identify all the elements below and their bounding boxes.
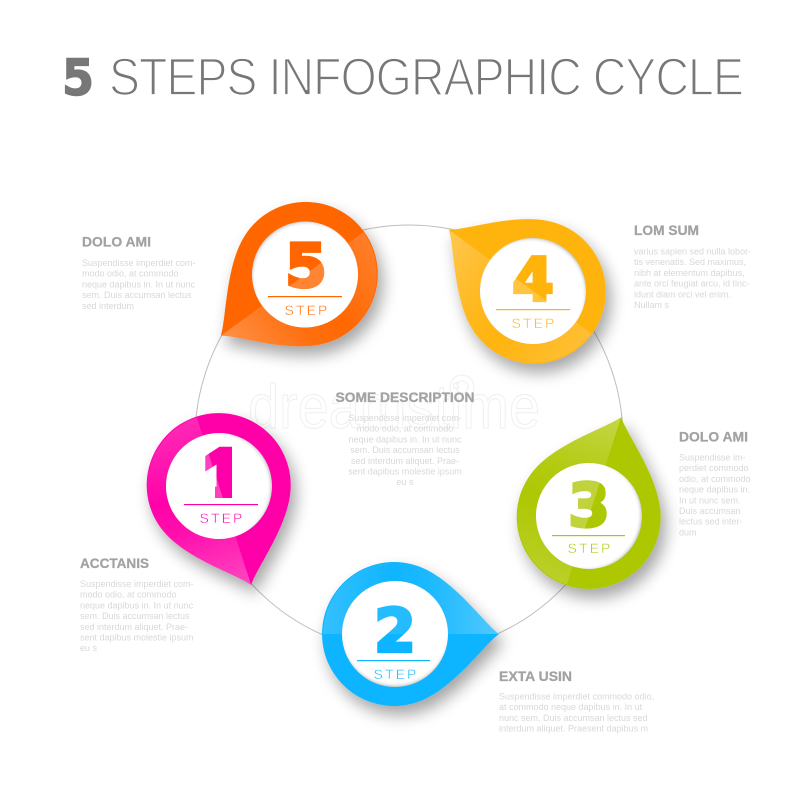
center text: sent dapibus molestie ipsum (348, 466, 462, 476)
center text: Suspendisse imperdiet com- (348, 413, 462, 423)
body: Suspendisse imperdiet com- (80, 579, 194, 589)
body (82, 258, 196, 311)
heading: ACCTANIS (80, 556, 149, 571)
green drop (498, 395, 690, 608)
body: Suspendisse imperdiet com- (82, 258, 196, 268)
number 4: 4 (512, 246, 554, 316)
body: ante orci feugiat arcu, id tinc- (634, 279, 750, 289)
drop highlight and inner disc (449, 230, 591, 362)
body (499, 692, 654, 734)
center description (336, 390, 474, 487)
body: Suspendisse imperdiet commodo odio, (499, 692, 654, 702)
step 2 marker (322, 562, 499, 706)
body: sent dapibus molestie ipsum (80, 632, 194, 642)
drop highlight and inner disc (323, 562, 499, 688)
body: varius sapien sed nulla lobor- (634, 246, 751, 256)
body: odio, at commodo (679, 474, 751, 484)
body: neque dapibus in. (679, 485, 750, 495)
text block: step 2 (499, 669, 654, 734)
divider (552, 535, 625, 536)
number 5: 5 (285, 232, 327, 302)
center text: sem. Duis accumsan lectus (350, 445, 460, 455)
divider (496, 309, 570, 310)
body: neque dapibus in. In ut nunc (80, 600, 194, 610)
number 3: 3 (568, 471, 610, 541)
body: sed interdum aliquet. Prae- (80, 622, 188, 632)
drop highlight and inner disc (148, 418, 272, 585)
drop highlight and inner disc (221, 222, 377, 346)
body: at commodo neque dapibus in. In ut (499, 702, 643, 712)
yellow drop (407, 172, 634, 392)
number 2: 2 (374, 596, 416, 666)
body: modo odio, at commodo (82, 269, 179, 279)
text block: step 1 (80, 556, 194, 653)
step label: STEP (512, 315, 556, 331)
center text (348, 413, 462, 487)
body: neque dapibus in. In ut nunc (82, 279, 196, 289)
divider (184, 504, 258, 505)
body: idunt diam orci vel enim. (634, 289, 731, 299)
step label: STEP (374, 666, 418, 682)
body: nibh at elementum dapibus, (634, 268, 745, 278)
text block: step 5 (82, 234, 196, 311)
center heading: SOME DESCRIPTION (336, 390, 474, 405)
heading: EXTA USIN (499, 669, 572, 684)
step label: STEP (285, 302, 329, 318)
body: Suspendisse im- (679, 452, 746, 462)
body: perdiet commodo (679, 463, 749, 473)
body: modo odio, at commodo (80, 590, 177, 600)
text block: step 4 (634, 223, 751, 310)
step 4 marker (446, 218, 620, 382)
center text: neque dapibus in. In ut nunc (348, 434, 462, 444)
step 5 marker (218, 201, 392, 366)
cycle ring line (195, 225, 623, 653)
body: sem. Duis accumsan lectus (82, 290, 192, 300)
drop highlight and inner disc (518, 418, 642, 584)
body: dum (679, 527, 697, 537)
body: tis venenatis. Sed maximus, (634, 257, 746, 267)
body: interdum aliquet. Praesent dapibus m (499, 724, 648, 734)
text block: step 3 (679, 430, 751, 537)
heading: DOLO AMI (679, 430, 748, 444)
blue drop (322, 562, 499, 706)
center text: eu s (396, 477, 414, 487)
body: sem. Duis accumsan lectus (80, 611, 190, 621)
title (62, 48, 743, 107)
number 1: 1 (204, 436, 242, 512)
center text: sed interdum aliquet. Prae- (351, 456, 459, 466)
orange drop (179, 173, 406, 394)
body: In ut nunc sem. (679, 495, 741, 505)
body: nunc sem. Duis accumsan lectus sed (499, 713, 648, 723)
watermark: dreamstime (248, 373, 540, 442)
step label: STEP (568, 540, 612, 556)
divider (357, 660, 430, 661)
heading: DOLO AMI (82, 234, 151, 250)
step 3 marker (512, 417, 676, 608)
magenta drop (128, 394, 320, 607)
body (80, 579, 194, 653)
step 1 marker (142, 412, 306, 600)
title number: 5 (62, 49, 94, 107)
body (634, 246, 751, 310)
body: lectus sed inter- (679, 517, 743, 527)
step label: STEP (200, 510, 244, 526)
body: Nullam s (634, 300, 670, 310)
heading: LOM SUM (634, 223, 699, 238)
body (679, 452, 751, 537)
center text: modo odio, at commodo (357, 424, 453, 434)
body: eu s (80, 643, 98, 653)
divider (268, 296, 342, 297)
body: Duis accumsan (679, 506, 741, 516)
body: sed interdum (82, 301, 134, 311)
